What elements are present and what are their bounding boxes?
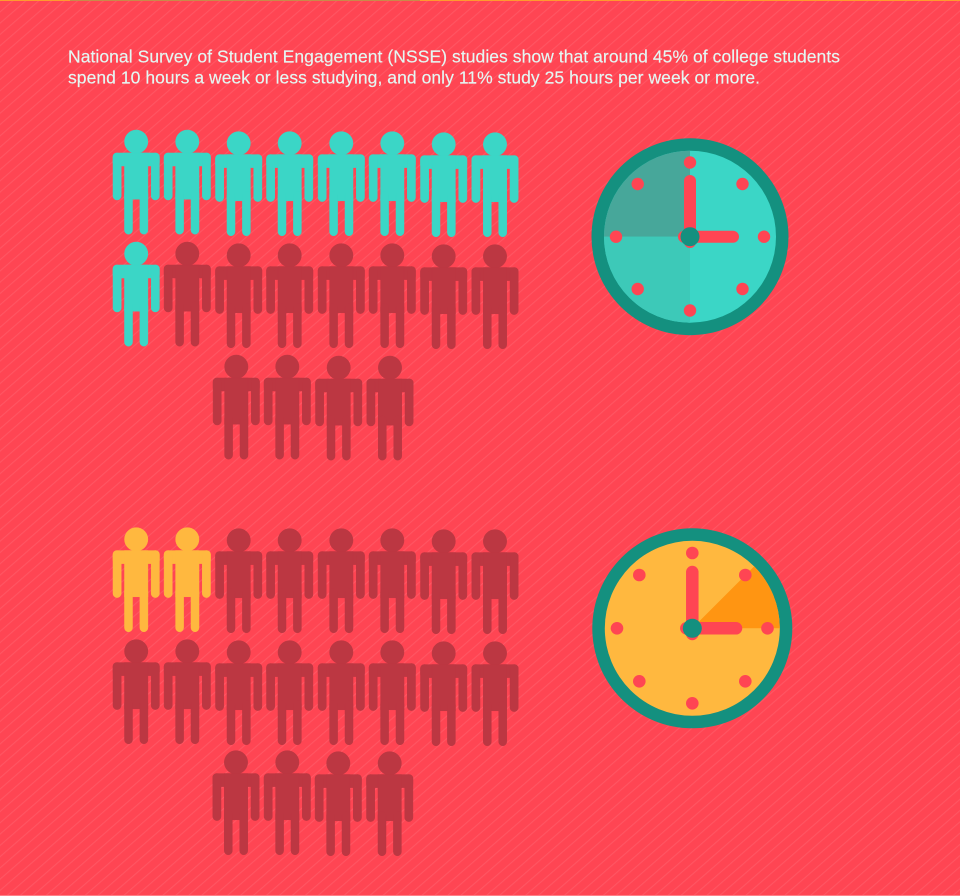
intro text: National Survey of Student Engagement (NSSE) studies show that around 45% of college students: [68, 46, 840, 66]
pictogram: 11% of students study 25 hours or more: [113, 528, 518, 856]
highlighted students: [113, 528, 210, 632]
highlighted students: [113, 130, 518, 346]
pictogram: 45% of students study 10 hours or less: [113, 130, 518, 460]
intro text: spend 10 hours a week or less studying, and only 11% study 25 hours per week or more.: [68, 68, 760, 88]
intro text: [68, 46, 840, 88]
remaining students: [164, 242, 518, 460]
icon: yellow clock, 25 hours: [592, 528, 792, 728]
icon: teal clock, 10 hours: [592, 138, 788, 335]
remaining students: [113, 529, 518, 856]
